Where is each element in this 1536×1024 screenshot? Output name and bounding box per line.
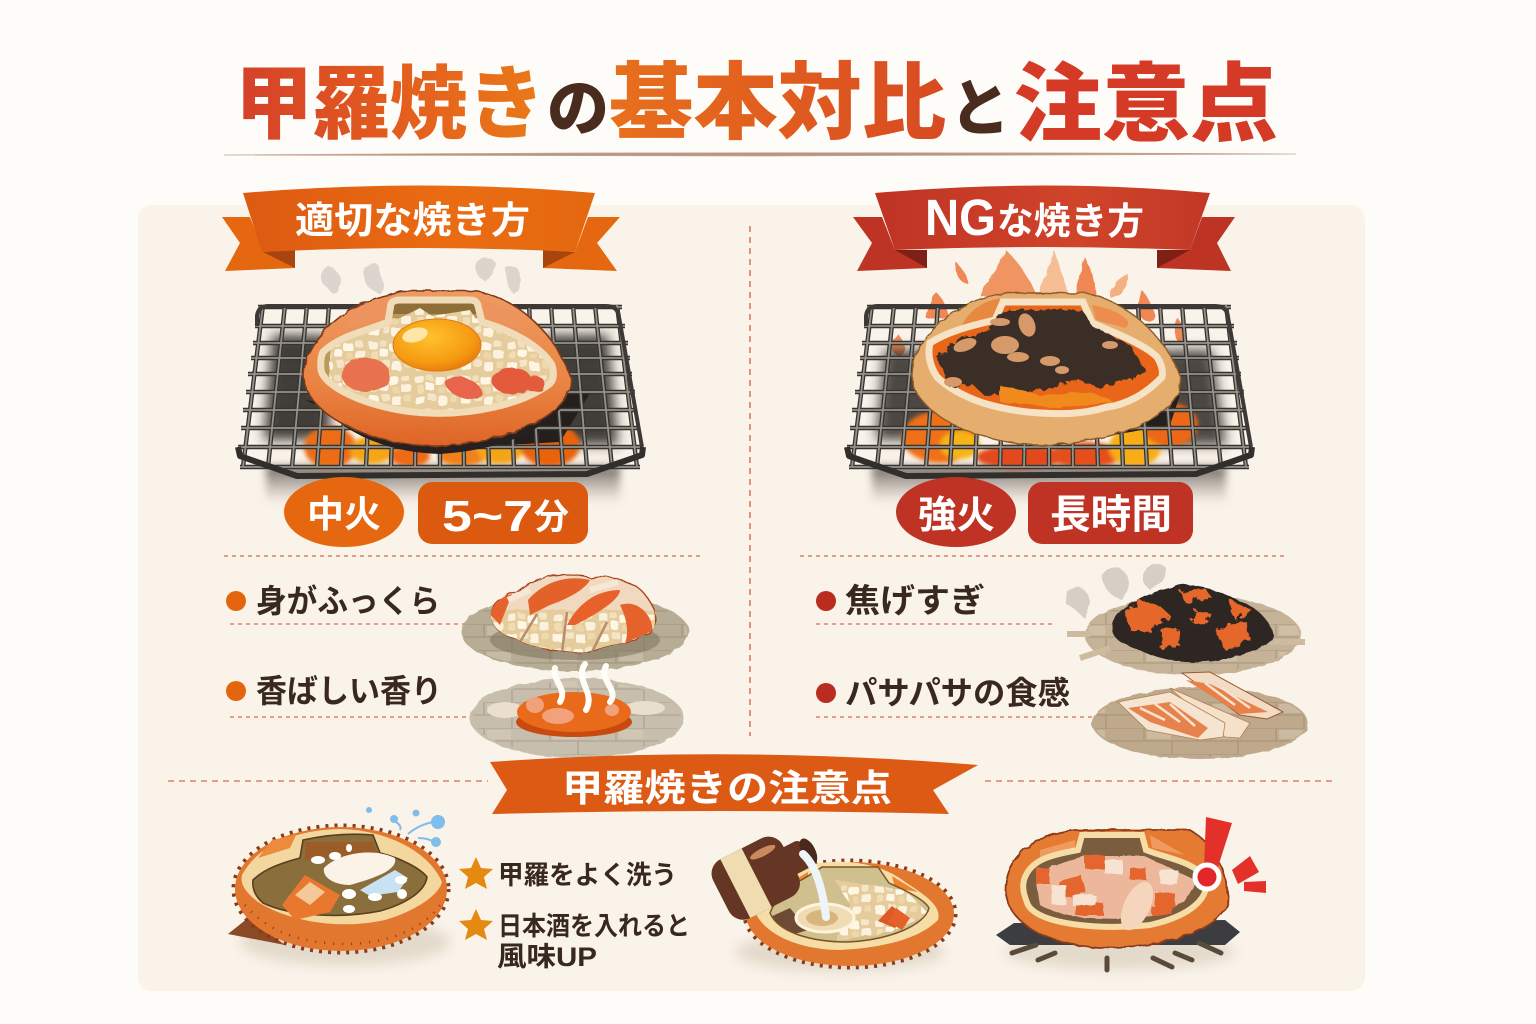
illustration: aromatic dish with steam	[470, 664, 684, 758]
icon: steam over good shell	[321, 257, 520, 294]
pill: high heat: 強火	[918, 495, 995, 537]
list item: too burnt: 焦げすぎ	[845, 582, 985, 619]
fire under grill	[304, 423, 580, 468]
icon: star 2	[459, 909, 493, 940]
illustration: burnt food with smoke	[1066, 564, 1305, 675]
title: 基本対比	[609, 56, 946, 150]
burner	[996, 920, 1240, 970]
ribbon: good heading	[222, 186, 620, 271]
ribbon: cautions heading	[490, 754, 978, 814]
icon: sake flask	[706, 819, 830, 925]
pill: high heat	[896, 477, 1016, 547]
ribbon: NG heading: な焼き方	[997, 201, 1144, 242]
char	[938, 310, 1146, 396]
cavity rice	[771, 868, 928, 942]
illustration: washing shell	[228, 807, 450, 966]
illustration: burnt shell on grill	[847, 293, 1252, 504]
panel: cautions	[168, 754, 1332, 972]
text: wash shell: 甲羅をよく洗う	[498, 860, 677, 890]
title: の	[547, 75, 609, 144]
list item: fluffy meat: 身がふっくら	[256, 583, 440, 619]
list item: dry texture: パサパサの食感	[845, 675, 1070, 711]
pill: 5 to 7 minutes	[418, 482, 588, 544]
title: 注意点	[1014, 57, 1278, 153]
text: add sake	[497, 911, 690, 972]
text: add sake: 日本酒を入れると	[498, 911, 690, 941]
shadow beneath grill	[266, 466, 620, 504]
title: と	[950, 75, 1010, 144]
panel: main background	[138, 205, 1365, 991]
pill: medium heat	[284, 477, 404, 547]
charred nuts	[944, 311, 1118, 387]
title	[235, 56, 1278, 153]
icon: water droplets	[366, 807, 445, 847]
title: 甲羅焼き	[235, 60, 545, 149]
grill wires	[238, 305, 643, 476]
pill: long time: 長時間	[1050, 493, 1172, 537]
illustration: dry fish slices	[1092, 672, 1308, 759]
illustration: grill with shell and egg	[238, 291, 643, 504]
pill: medium heat: 中火	[307, 494, 381, 535]
illustration: fluffy crab meat on plate	[461, 575, 689, 671]
ribbon: good heading: 適切な焼き方	[295, 200, 530, 241]
burnt crab shell	[912, 293, 1181, 445]
egg yolk	[393, 319, 481, 371]
illustration: shell on burner with warning	[996, 817, 1266, 970]
icon: warning mark	[1195, 817, 1266, 893]
fire under burnt grill	[902, 403, 1198, 469]
list item: fragrant aroma: 香ばしい香り	[256, 673, 442, 709]
icon: flames	[891, 250, 1184, 356]
panel: bad grilling	[800, 186, 1308, 759]
panel: good grilling	[222, 186, 700, 758]
pill: 5 to 7 minutes: 分	[534, 498, 569, 537]
pill: 5 to 7 minutes: 5~7	[442, 492, 533, 541]
crab shell	[303, 291, 571, 454]
ribbon: NG heading	[853, 186, 1235, 271]
ribbon: cautions heading: 甲羅焼きの注意点	[562, 768, 892, 809]
salmon bits	[342, 358, 545, 404]
icon: star 1	[459, 857, 493, 889]
text: add sake: 風味UP	[497, 942, 597, 972]
rice filling	[324, 304, 550, 410]
wires on burnt grill	[847, 305, 1252, 476]
pill: long time	[1028, 482, 1193, 544]
ribbon: NG heading: NG	[925, 189, 996, 246]
illustration: pouring sake into shell	[706, 819, 954, 972]
